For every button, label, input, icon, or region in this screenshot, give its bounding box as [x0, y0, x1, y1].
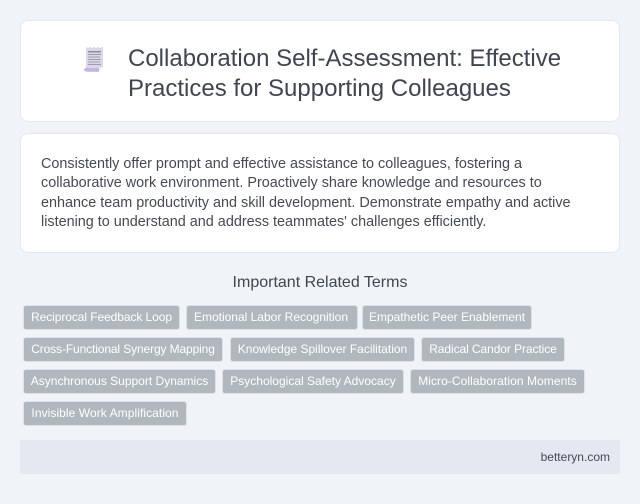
chip: Knowledge Spillover Facilitation: Knowledge Spillover Facilitation	[238, 342, 407, 356]
header panel	[20, 20, 620, 122]
description panel	[20, 133, 620, 253]
footer bar	[20, 440, 620, 474]
description text	[41, 156, 571, 230]
chip: Reciprocal Feedback Loop: Reciprocal Feedback Loop	[31, 310, 172, 324]
chip: Micro-Collaboration Moments	[410, 369, 585, 394]
term chips	[23, 305, 585, 426]
chip: Reciprocal Feedback Loop	[23, 305, 180, 330]
description text: enhance team productivity and skill development. Demonstrate empathy and active	[41, 195, 571, 211]
icon: document scroll	[84, 47, 103, 72]
description text: Consistently offer prompt and effective assistance to colleagues, fostering a	[41, 156, 522, 172]
footer: site name: betteryn.com	[541, 450, 610, 464]
chip: Empathetic Peer Enablement	[362, 305, 532, 330]
title: Practices for Supporting Colleagues	[128, 75, 511, 102]
chip: Emotional Labor Recognition	[186, 305, 358, 330]
title: Collaboration Self-Assessment: Effective	[128, 45, 561, 72]
chip: Radical Candor Practice: Radical Candor Practice	[429, 342, 557, 356]
chip: Empathetic Peer Enablement: Empathetic Peer Enablement	[369, 310, 525, 324]
chip: Psychological Safety Advocacy: Psychological Safety Advocacy	[230, 374, 396, 388]
description text: collaborative work environment. Proactively share knowledge and resources to	[41, 175, 542, 191]
chip: Asynchronous Support Dynamics: Asynchronous Support Dynamics	[31, 374, 208, 388]
chip: Cross-Functional Synergy Mapping	[23, 337, 223, 362]
chip: Knowledge Spillover Facilitation	[230, 337, 415, 362]
chip: Asynchronous Support Dynamics	[23, 369, 216, 394]
heading: related terms: Important Related Terms	[233, 274, 407, 291]
chip: Cross-Functional Synergy Mapping: Cross-Functional Synergy Mapping	[31, 342, 215, 356]
chip: Psychological Safety Advocacy	[222, 369, 404, 394]
chip: Invisible Work Amplification	[23, 401, 187, 426]
description text: listening to understand and address teammates' challenges efficiently.	[41, 214, 486, 230]
chip: Emotional Labor Recognition: Emotional Labor Recognition	[194, 310, 348, 324]
title	[128, 45, 561, 102]
chip: Micro-Collaboration Moments: Micro-Collaboration Moments	[418, 374, 577, 388]
chip: Radical Candor Practice	[421, 337, 565, 362]
chip: Invisible Work Amplification: Invisible Work Amplification	[31, 406, 179, 420]
